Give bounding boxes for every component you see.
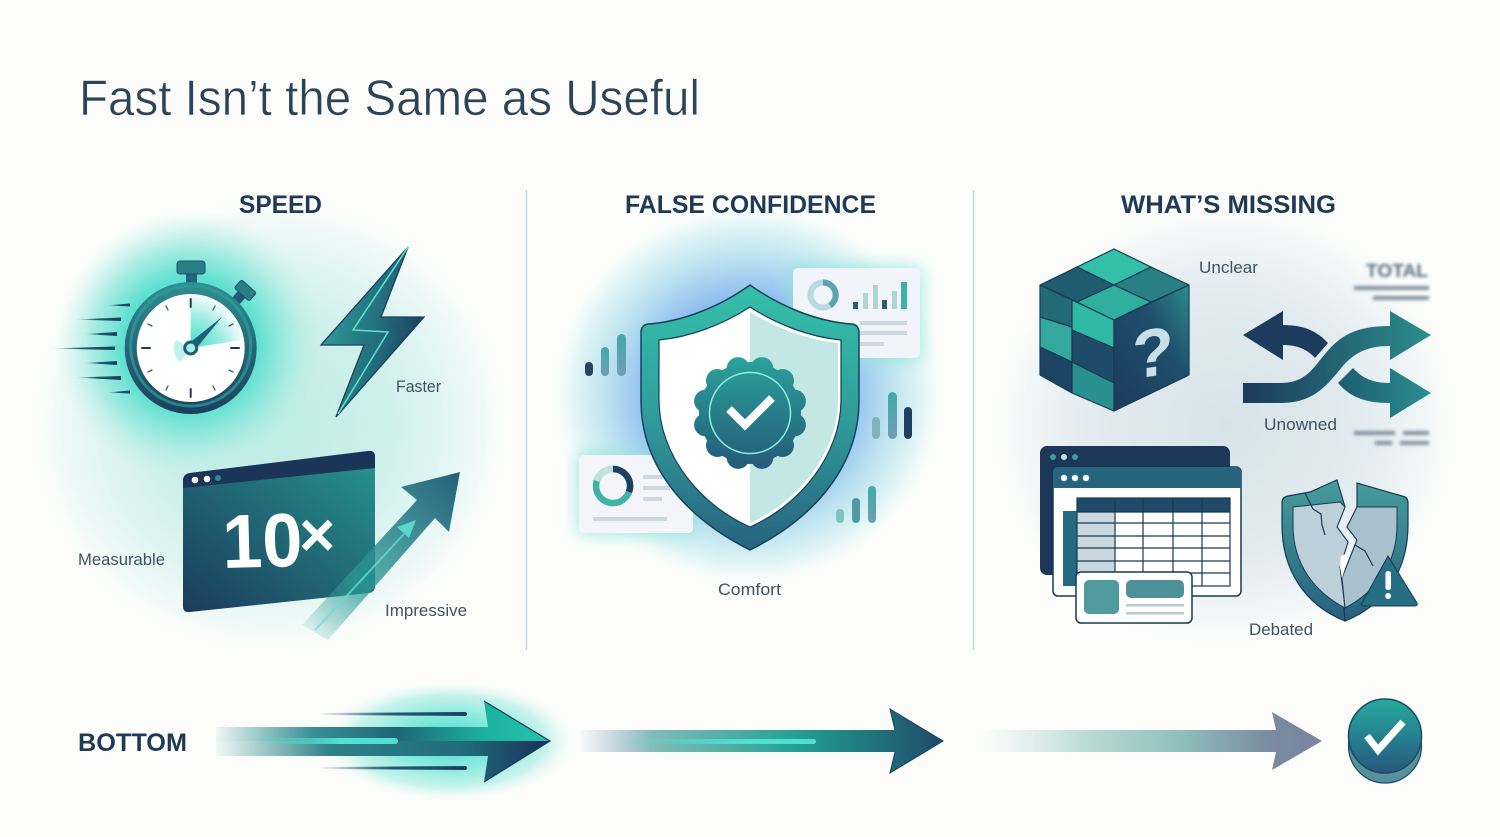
chart: right bars (872, 392, 912, 439)
icon: shield with check (641, 285, 859, 550)
chart: bottom bars (836, 486, 876, 523)
label: unowned: Unowned (1264, 415, 1337, 434)
bottom arrow 1: fast (216, 679, 580, 803)
heading: false confidence: FALSE CONFIDENCE (625, 191, 876, 219)
icon: rising arrow (302, 472, 460, 640)
panel: false confidence (548, 191, 948, 599)
icon: check button (1348, 699, 1422, 783)
blurred total note: TOTAL (1366, 261, 1428, 281)
label: impressive: Impressive (385, 601, 467, 620)
warning triangle (1361, 556, 1417, 606)
label: faster: Faster (396, 377, 441, 396)
heading: what's missing: WHAT’S MISSING (1121, 191, 1336, 219)
icon: 10x window: 10 (221, 498, 303, 585)
label: unclear: Unclear (1199, 258, 1258, 277)
label: measurable: Measurable (78, 550, 165, 569)
icon: cube with question mark (1040, 249, 1189, 411)
icon: cube with question mark: ? (1132, 312, 1174, 394)
title: Fast Isn’t the Same as Useful (79, 70, 700, 126)
blurred total note (1354, 261, 1429, 445)
label: comfort: Comfort (718, 580, 781, 599)
badge (694, 357, 806, 469)
heading: speed: SPEED (239, 191, 322, 219)
chart: left bars (585, 334, 626, 376)
icon: broken shield with warning (1282, 480, 1417, 621)
icon: spreadsheet windows (1040, 446, 1241, 623)
icon: stopwatch (50, 261, 257, 414)
panel: what's missing (985, 191, 1465, 655)
bottom label: BOTTOM (78, 729, 187, 757)
card: bottom left dashboard (579, 455, 693, 533)
card: top right dashboard (793, 268, 920, 358)
panel: speed (25, 190, 515, 660)
icon: tangled arrows (1243, 311, 1431, 418)
icon: 10x window: × (299, 501, 335, 570)
bottom arrow 3: fading (980, 712, 1322, 770)
icon: lightning bolt (321, 247, 424, 417)
icon: 10x window (183, 451, 375, 612)
label: debated: Debated (1249, 620, 1313, 639)
bottom arrow 2: slower (578, 709, 943, 773)
small overlay card (1076, 572, 1192, 623)
